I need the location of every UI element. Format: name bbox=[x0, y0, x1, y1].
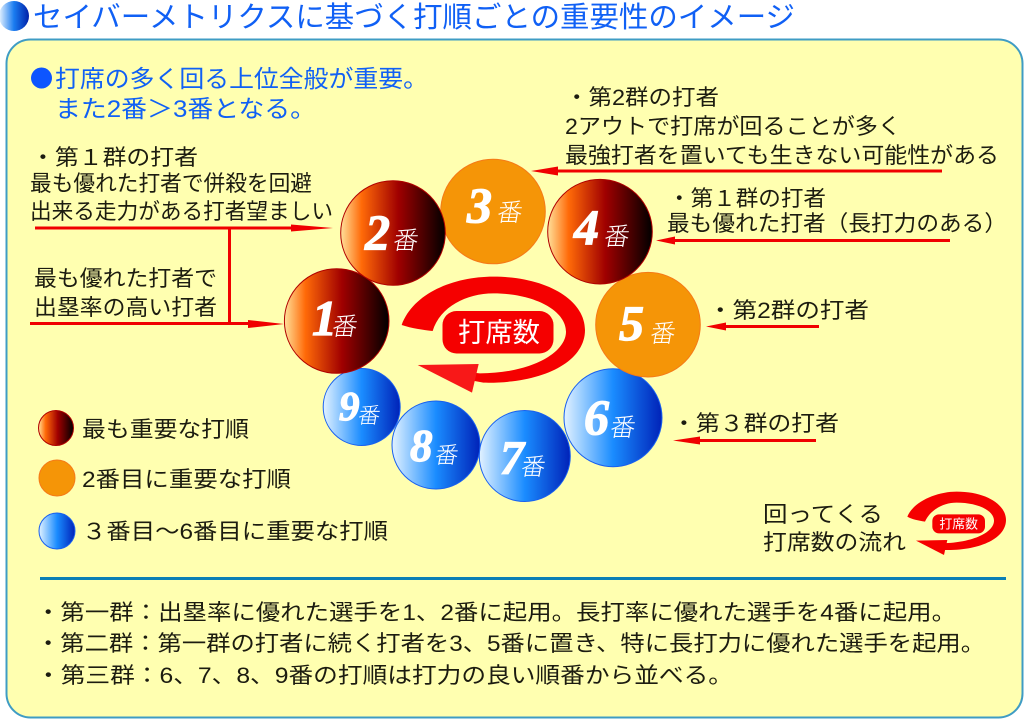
batter 2: 番 bbox=[391, 221, 422, 257]
batter 4: 番 bbox=[602, 217, 633, 253]
note: batter 4: ・第１群の打者 bbox=[668, 186, 826, 211]
note: batter 3: ・第2群の打者 bbox=[565, 85, 719, 110]
group descriptions: ・第三群：6、7、8、9番の打順は打力の良い順番から並べる。 bbox=[36, 663, 733, 688]
batter 1 bbox=[284, 269, 389, 373]
title icon bbox=[0, 1, 29, 31]
note: batter 2: 最も優れた打者で併殺を回避 bbox=[30, 171, 312, 196]
flow legend text: 打席数の流れ bbox=[763, 530, 906, 555]
arrow: to batter 6 bbox=[673, 436, 816, 444]
key message bbox=[31, 66, 428, 123]
batter 1: 1 bbox=[312, 290, 337, 346]
batter 9: 9 bbox=[339, 383, 360, 429]
divider bbox=[40, 577, 1006, 580]
batter 7: 番 bbox=[519, 447, 549, 482]
note: batter 1: 出塁率の高い打者 bbox=[34, 295, 217, 320]
batter 4 bbox=[548, 179, 652, 284]
batter 7: 7 bbox=[500, 432, 526, 485]
flow legend arrow bbox=[907, 492, 1006, 555]
legend: second: 2番目に重要な打順 bbox=[82, 467, 291, 492]
group descriptions bbox=[36, 600, 985, 688]
note: batter 3: 最強打者を置いても生きない可能性がある bbox=[565, 143, 999, 168]
group descriptions: ・第一群：出塁率に優れた選手を1、2番に起用。長打率に優れた選手を4番に起用。 bbox=[36, 600, 956, 625]
batter 2 bbox=[341, 181, 445, 285]
flow legend text bbox=[763, 502, 906, 555]
central flow arrow bbox=[402, 277, 585, 393]
note: batter 3: 2アウトで打席が回ることが多く bbox=[565, 114, 901, 139]
batter 6: 番 bbox=[608, 408, 639, 444]
note: batter 4: 最も優れた打者（長打力のある） bbox=[667, 211, 1007, 236]
note: batter 3 bbox=[565, 85, 999, 168]
note: batter 1: 最も優れた打者で bbox=[34, 266, 217, 291]
batter 6 bbox=[564, 369, 662, 467]
note: batter 2: ・第１群の打者 bbox=[31, 145, 198, 170]
flow legend text: 回ってくる bbox=[763, 502, 883, 527]
batter 9: 番 bbox=[356, 398, 383, 430]
batter 2: 2 bbox=[364, 204, 390, 260]
arrow: to batter 5 bbox=[706, 322, 819, 330]
batter 1: 番 bbox=[330, 307, 361, 343]
note: batter 2 bbox=[30, 145, 333, 224]
batter 8: 8 bbox=[410, 421, 432, 471]
central label bbox=[442, 311, 554, 354]
batter 8: 番 bbox=[433, 436, 462, 470]
batter 5 bbox=[596, 272, 700, 377]
batter 7 bbox=[479, 410, 570, 502]
batter 8 bbox=[392, 401, 480, 489]
arrow: to batter 4 bbox=[656, 236, 950, 244]
title: セイバーメトリクスに基づく打順ごとの重要性のイメージ bbox=[33, 1, 795, 34]
arrows: to batters 1 and 2 bbox=[30, 224, 333, 328]
flow legend arrow: 打席数 bbox=[939, 516, 978, 531]
note: batter 6: ・第３群の打者 bbox=[672, 411, 839, 436]
key message: 打席の多く回る上位全般が重要。 bbox=[55, 66, 428, 93]
key message: また2番＞3番となる。 bbox=[55, 96, 316, 123]
legend: second bbox=[39, 460, 291, 496]
batter 3 bbox=[441, 159, 545, 264]
batter 6: 6 bbox=[584, 389, 609, 445]
legend: third: ３番目～6番目に重要な打順 bbox=[82, 519, 388, 544]
legend bbox=[38, 410, 388, 549]
batter 4: 4 bbox=[573, 199, 599, 255]
legend: most important bbox=[38, 410, 249, 446]
batter 5: 5 bbox=[619, 295, 644, 351]
batter 3: 3 bbox=[466, 177, 492, 233]
note: batter 1 bbox=[34, 266, 217, 320]
note: batter 2: 出来る走力がある打者望ましい bbox=[30, 199, 333, 224]
batter 9 bbox=[323, 368, 400, 446]
batter 3: 番 bbox=[495, 193, 526, 229]
legend: most important: 最も重要な打順 bbox=[82, 417, 249, 442]
batter 5: 番 bbox=[648, 314, 679, 350]
note: batter 4 bbox=[667, 186, 1007, 236]
central label: 打席数 bbox=[458, 318, 540, 348]
group descriptions: ・第二群：第一群の打者に続く打者を3、5番に置き、特に長打力に優れた選手を起用。 bbox=[36, 631, 985, 656]
legend: third bbox=[39, 513, 388, 549]
arrow: to batter 3 bbox=[531, 166, 942, 176]
note: batter 5: ・第2群の打者 bbox=[708, 298, 869, 323]
